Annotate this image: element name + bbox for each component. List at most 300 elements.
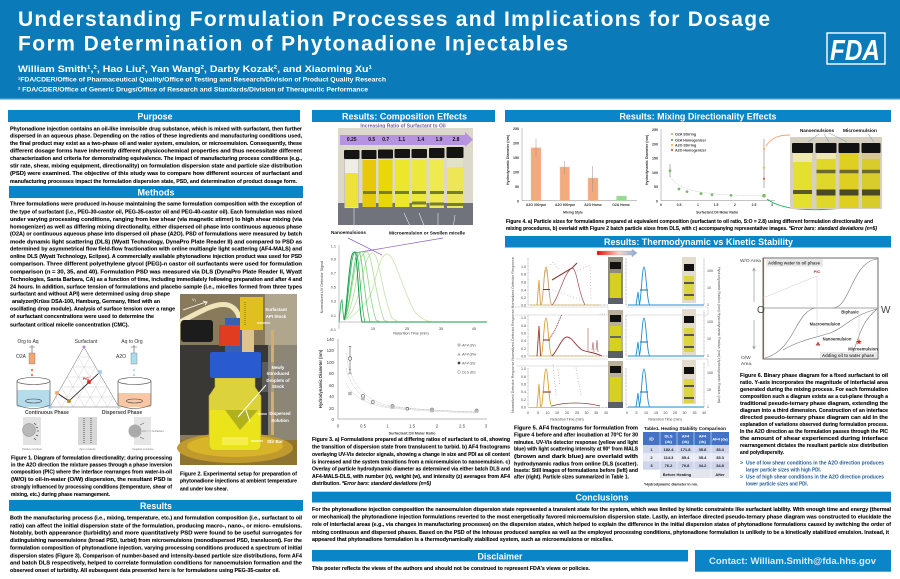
table 1: heating stability comparison: 3	[650, 463, 653, 468]
figure 4b: scatter chart: 2.5	[752, 203, 756, 207]
takeaway bullets: >	[740, 460, 743, 466]
figure 4b: scatter chart: 1.5	[714, 203, 718, 207]
takeaway bullets: lower particle sizes and PDI.	[746, 481, 808, 487]
legend: A2O Homogenizer	[675, 148, 707, 152]
table 1: heating stability comparison: AF4	[699, 434, 707, 438]
panel: conclusions: or mechanical) the phytonadione injection formulations reverted to the most energetically favored microemulsion dispersion state. Lastly, an interface directed pseudo-ternary phase diagram was constructed to elucidate the	[312, 515, 891, 521]
table 1: heating stability comparison: 171.8	[680, 447, 691, 452]
figure 1: formulation directionality diagram: A2O	[116, 354, 126, 360]
figure 5: fractograms grid: 1	[707, 303, 709, 307]
figure 3b: fractogram chart: 45	[472, 327, 476, 331]
figure 3a: vial photo with ratio arrow: Nanoemulsions	[331, 230, 366, 235]
figure 4b: scatter chart: 3	[771, 203, 773, 207]
error bar	[349, 346, 351, 370]
table 1: heating stability comparison: AF4 (dₕ)	[712, 436, 728, 442]
panel: methods: oscillating drop module). Analysis of surface tension over a range	[10, 307, 175, 313]
icon: FDA logo: FDA	[830, 35, 880, 67]
figure 5: fractograms grid: 10	[644, 411, 648, 415]
figure 3c: hydrodynamic diameter chart: 2	[436, 424, 439, 428]
figure 2: experimental setup photo: Newly	[272, 365, 285, 370]
label: dispersed solution: Solution	[271, 418, 289, 423]
figure 5: fractograms grid: 100	[707, 269, 713, 273]
figure 3 caption: is increased and the system transitions from a microemulsion to nanoemulsion. c)	[312, 460, 510, 466]
panel: disclaimer: Disclaimer	[478, 551, 523, 561]
figure 4b: scatter chart: 150	[652, 156, 658, 160]
panel: results text: ratio) can affect the initial dispersion state of the formulation, producing macro-, nano-, or micro- emulsions.	[10, 524, 303, 530]
figure 1: formulation directionality diagram: O2A	[16, 354, 27, 360]
figure 6 caption: diagram into a third dimension. Construction of an interface	[740, 408, 888, 414]
row frame lines	[515, 307, 708, 366]
data points	[348, 357, 478, 412]
figure 5: fractograms grid: 0.8	[521, 272, 526, 276]
legend	[457, 344, 477, 374]
figure 6 caption: Figure 6. Binary phase diagram for a fixed surfactant to oil	[740, 373, 888, 379]
affiliations	[18, 76, 386, 94]
figure 4a: bar chart: 250	[513, 127, 519, 131]
figure 3 caption: overlaying UV-Vis detector signals, showing a change in size and PDI as oil content	[312, 452, 510, 458]
table 1: heating stability comparison: 1	[650, 447, 653, 452]
figure 2 caption: Figure 2. Experimental setup for preparation of	[180, 472, 297, 478]
panel: methods: (O2A) or continuous aqueous phase into dispersed oil phase (A2O). PSD of formulations were measured by batch	[10, 231, 302, 237]
table 1: heating stability comparison: 35.4	[699, 455, 707, 460]
figure 3c: hydrodynamic diameter chart: 0	[332, 417, 335, 422]
table 1: heating stability comparison: 35.4	[716, 447, 725, 452]
figure 5: fractograms grid: 0.8	[521, 324, 526, 328]
panel: results text: observed onset of turbidity. All subsequent data presented here is for formulations using PEG-35-castor oil.	[10, 568, 280, 574]
figure 5: fractograms grid: 5	[636, 411, 638, 415]
vial bands	[363, 192, 463, 204]
figure 3c: hydrodynamic diameter chart: 100	[327, 360, 335, 365]
figure 3c: hydrodynamic diameter chart: 3	[485, 424, 488, 428]
figure 6 caption: explanation of variations observed during formulation process.	[740, 422, 888, 428]
panel: results text: dispersion states (Figure 3). Comparison of number-based and intensity-based particle size distributions, form AF4	[10, 554, 302, 560]
table 1: heating stability comparison: 70.8	[682, 463, 690, 468]
figure 5: fractograms grid: 10	[707, 388, 711, 392]
figure 3 caption: Figure 3. a) Formulations prepared at differing ratios of surfactant to oil, showing	[312, 437, 510, 443]
figure 3c: hydrodynamic diameter chart: 2.5	[459, 424, 466, 428]
figure 4a: bar chart: A2O 300rpm	[526, 203, 546, 207]
figure 3b: fractogram chart: Normalized UV Detector Signal	[320, 261, 324, 313]
red cap	[219, 325, 240, 346]
label: dispersed solution: Dispersed	[269, 411, 291, 416]
figure 6 caption: directed pseudo-ternary phase diagram can aid in the	[740, 415, 888, 421]
figure 6: binary phase diagram: Nanoemulsion	[823, 336, 852, 342]
panel: conclusions: For the phytonadione injection composition the nanoemulsion dispersion state represented a transient state for the system, which was limited by kinetic constraints like surfactant lability. With enough time and energy (thermal	[312, 507, 891, 513]
panel: results text	[9, 500, 303, 574]
labels inside diagram	[766, 259, 823, 266]
figure 6: binary phase diagram: Area.	[741, 361, 752, 367]
figure 4b: scatter chart: 100	[652, 171, 658, 175]
panel: disclaimer: This poster reflects the views of the authors and should not be construed to represent FDA's views or policies.	[312, 566, 590, 572]
figure 5: fractograms grid: 100	[707, 320, 713, 324]
figure 2 caption: and under low shear.	[180, 486, 228, 492]
figure 1 caption: Figure 1. Diagram of formulation directionality; during processing	[11, 456, 172, 462]
figure 4c: vial photo	[790, 128, 882, 209]
figure 6 caption	[740, 373, 889, 456]
figure 4a: bar chart: O2A Homo	[612, 203, 630, 207]
legend	[671, 132, 707, 152]
insets: before heating vials	[608, 257, 623, 408]
title: Understanding Formulation Processes and Implications for Dosage	[18, 8, 770, 31]
figure 3c: hydrodynamic diameter chart: 40	[329, 394, 335, 399]
label: surfactant stock	[265, 307, 287, 319]
figure 3c: hydrodynamic diameter chart: Hydrodynamic Diameter (nm)	[318, 349, 323, 408]
figure 5: fractograms grid: 0.0	[521, 406, 526, 410]
figure 4 caption: mixing procedures, b) overlaid with Figure 2 batch particle sizes from DLS, with c) accompanying representative images. *Error bars: standard deviations (n=5)	[506, 226, 877, 232]
figure 5: fractograms grid: 0.4	[521, 288, 526, 292]
panel: methods: Three formulations were produced in-house maintaining the same formulation composition with the exception of	[10, 202, 302, 208]
tubing	[180, 304, 241, 328]
figure 3a: vial photo with ratio arrow	[331, 124, 473, 236]
figure 5 caption: Figure 5. AF4 fractograms for formulation from	[514, 425, 638, 431]
threaded connector	[242, 328, 254, 352]
contact box: Contact: William.Smith@fda.hhs.gov	[709, 556, 877, 567]
figure 4a: bar chart: A2O 600rpm	[555, 203, 575, 207]
panel: purpose: different dosage forms have inherently different physicochemical properties and thus necessitate different	[10, 149, 302, 155]
takeaway bullets	[740, 460, 884, 487]
figure 2: experimental setup photo	[177, 294, 297, 465]
table 1: heating stability comparison: (dₕ)	[699, 439, 707, 444]
figure 4a: bar chart: 200	[513, 142, 519, 146]
figure 4b: scatter chart: Surfactant:Oil Molar Ratio	[696, 210, 738, 214]
figure 3b: fractogram chart: 0.3	[331, 300, 336, 304]
error bars	[536, 139, 593, 192]
figure 4 caption: Figure 4. a) Particle sizes for formulations prepared at equivalent composition (surfactant to oil ratio, S:O = 2.8) using different formulation directionality and	[506, 219, 873, 225]
table 1: heating stability comparison: 114.3	[664, 455, 674, 460]
icon: A2O syringe and beaker	[118, 345, 151, 408]
blue cap	[210, 352, 261, 378]
bars	[531, 148, 541, 201]
figure 5: fractograms grid: 0	[527, 411, 529, 415]
figure 2: experimental setup photo: Droplets of	[266, 378, 290, 383]
figure 3b: fractogram chart: 0.5	[331, 286, 336, 290]
legend: AF4 dhw	[461, 352, 477, 356]
panel: results text: Results	[140, 501, 172, 511]
authors: William Smith¹,², Hao Liu², Yan Wang², Darby Kozak², and Xiaoming Xu¹	[18, 64, 372, 75]
figure 5: fractograms grid: 1.0	[521, 367, 526, 371]
panel: conclusions	[312, 492, 891, 543]
figure 5: fractograms grid: Hydrodynamic Radius (nm) Hydrodynamic Radius (nm) Hydrodynamic Radius (nm)	[717, 267, 721, 403]
panel: purpose	[8, 110, 303, 185]
icon: positive curvature	[22, 417, 43, 451]
figure 6: binary phase diagram: Macroemulsion	[810, 321, 841, 326]
legend: O2A Stirring	[675, 132, 696, 136]
figure 5: fractograms grid: 0.6	[521, 280, 526, 284]
figure 3b: fractogram chart: 0.9	[331, 258, 336, 262]
figure 4b: scatter chart: 250	[652, 128, 658, 132]
figure 6: binary phase diagram: O/W	[741, 355, 751, 361]
ternary diagram: PIC	[83, 377, 89, 381]
figure 4b: scatter chart: 50	[654, 185, 658, 189]
figure 5: fractograms grid: 10	[707, 286, 711, 290]
figure 5: fractograms grid: 35	[594, 411, 598, 415]
vial pointer lines	[354, 208, 455, 231]
panel: results text: Both the manufacturing process (i.e., mixing, temperature, etc.) and formulation composition (i.e., surfactant to oil	[10, 516, 302, 522]
table 1: heating stability comparison: 34.8	[716, 463, 725, 468]
table 1: heating stability comparison: 182.4	[663, 447, 674, 452]
figure 4b: scatter chart: Hydrodynamic Diameter (nm)	[645, 134, 649, 185]
figure 4b: scatter chart	[645, 128, 873, 214]
figure 3c: hydrodynamic diameter chart: 0.5	[360, 424, 367, 428]
figure 4a: bar chart: Hydrodynamic Diameter (nm)	[506, 134, 510, 185]
figure 6: binary phase diagram: Biphasic	[841, 310, 859, 314]
figure 5: fractograms grid: 0.8	[521, 375, 526, 379]
panel: purpose: Phytonadione injection contains an oil-like immiscible drug substance, which is mixed with surfactant, then further	[10, 126, 303, 132]
figure 3a: vial photo with ratio arrow: 2.8	[453, 137, 460, 143]
figure 6 caption: the amount of shear experienced during interface	[740, 436, 888, 442]
arrows to photo	[766, 135, 790, 146]
figure 2 caption: phytonadione injections at ambient temperature	[180, 479, 297, 485]
legend: AF4 dhn	[461, 344, 476, 348]
figure 3b: fractogram chart: Retention Time (min)	[393, 332, 429, 336]
figure 2: experimental setup photo: Stock	[272, 384, 285, 389]
figure 5: fractograms grid: 30	[584, 411, 588, 415]
figure 4b: scatter chart: 0	[660, 203, 662, 207]
figure 5: fractograms grid: 15	[555, 411, 559, 415]
takeaway bullets: Use of high shear conditions in the A2O direction produces	[746, 475, 884, 481]
figure 2: experimental setup photo: V₁	[192, 297, 197, 302]
figure 4b: scatter chart: 200	[652, 142, 658, 146]
figure 3 caption	[312, 437, 510, 487]
axes	[528, 258, 704, 407]
icon: zero curvature: Zero curvature	[79, 448, 96, 451]
figure 1 caption	[11, 456, 172, 498]
table 1: heating stability comparison: DLS	[664, 434, 673, 438]
figure 5: fractograms grid: 0.4	[521, 339, 526, 343]
figure 3a: vial photo with ratio arrow: 1.4	[417, 137, 424, 143]
figure 5: fractograms grid: 0.0	[521, 354, 526, 358]
figure 6 caption: composition such a diagram exists as a cut-plane through a	[740, 394, 889, 400]
figure 5: fractograms grid: 0.6	[521, 382, 526, 386]
label: dispersed solution	[269, 411, 291, 423]
panel: purpose: the final product may exist as a two-phase oil and water system, emulsion, or microemulsion. Consequently, these	[10, 141, 302, 147]
figure 5: fractograms grid: 0.4	[521, 390, 526, 394]
figure 5: fractograms grid: 10	[707, 337, 711, 341]
icon: negative curvature: Negative curvature	[133, 448, 154, 451]
figure 1: formulation directionality diagram: Surfactant	[75, 339, 98, 345]
contact box	[695, 550, 891, 572]
figure 5: fractograms grid: 1	[707, 405, 709, 409]
panel: conclusions: appeared that phytonadione formulation is a thermodynamically stabilized system, such as microemulsions or micelles.	[312, 537, 613, 543]
figure 5: fractograms grid: 5	[537, 411, 539, 415]
figure 3a: vial photo with ratio arrow: 0.5	[368, 137, 375, 143]
figure 1: formulation directionality diagram: Org to Aq	[17, 339, 39, 345]
panel: methods: surfactant critical micelle concentration (CMC).	[10, 322, 129, 328]
panel: methods: online DLS (Wyatt Technology, Eclipse). A commercially available phytonadione injection product was used for PSD	[10, 254, 302, 260]
panel: results text: and batch DLS respectively, helped to correlate formulation conditions for nanoemulsion formation and the	[10, 561, 302, 567]
affiliations: ² FDA/CDER/Office of Generic Drugs/Office of Research and Standards/Division of Therapeutic Performance	[18, 86, 369, 94]
insets: after heating vials	[682, 257, 696, 404]
table 1: heating stability comparison: (dₕ)	[665, 439, 673, 444]
figure 5: fractograms grid	[511, 257, 721, 422]
figure 6: binary phase diagram	[740, 258, 891, 367]
label: surfactant stock: API Stock	[266, 314, 287, 319]
figure 5 caption: after (right). Particle sizes summarized in Table 1.	[514, 475, 629, 481]
heading: mixing directionality effects: Results: Mixing Directionality Effects	[620, 112, 776, 122]
panel: purpose: (PSD) were examined. The objective of this study was to compare how different sources of surfactant and	[10, 171, 302, 177]
figure 1: formulation directionality diagram: Dispersed Phase	[102, 410, 142, 416]
figure 2: experimental setup photo: Introduced	[267, 371, 290, 376]
figure 1 caption: strongly influenced by processing conditions (temperature, shear of	[11, 485, 172, 491]
figure 3b: fractogram chart: 1.1	[331, 244, 336, 248]
figure 4b: scatter chart: 0.5	[677, 203, 681, 207]
figure 6 caption: In the A2O direction as the formulation passes through the PIC	[740, 429, 888, 435]
panel: purpose: manufacturing processes impact the formulation dispersion state, PSD, and determination of product dosage form.	[10, 179, 297, 185]
figure 5: fractograms grid: 1.0	[521, 316, 526, 320]
figure 3a: vial photo with ratio arrow: Increasing Ratio of Surfactant to Oil	[360, 124, 446, 130]
figure 3a: vial photo with ratio arrow: 0.25	[347, 137, 357, 143]
figure 4a: bar chart: 150	[513, 156, 519, 160]
ternary diagram	[48, 346, 120, 408]
figure 4a: bar chart: 50	[515, 185, 519, 189]
figure 5: fractograms grid: 40	[702, 411, 706, 415]
figure 4a: bar chart: 0	[517, 200, 519, 204]
figure 5: fractograms grid: 0.2	[521, 296, 526, 300]
label: surfactant stock: Surfactant	[265, 307, 287, 312]
figure 3b: fractogram chart: 15	[371, 327, 375, 331]
arrow: before to after heating	[597, 249, 637, 257]
data points	[669, 170, 766, 197]
figure 3b: fractogram chart: 25	[405, 327, 409, 331]
figure 4b: scatter chart: 1	[697, 203, 699, 207]
figure 4a: bar chart: Mixing Style	[563, 210, 583, 214]
figure 6: binary phase diagram: W	[881, 305, 891, 316]
figure 6: binary phase diagram: Adding water to oil phase	[768, 260, 821, 266]
figure 5: fractograms grid: 100	[707, 371, 713, 375]
panel: methods: homogenizer) as well as differing mixing directionality, either dispersed oil phase into continuous aqueous phase	[10, 225, 302, 231]
panel: methods: mode dynamic light scattering (DLS) (Wyatt Technology, DynaPro Plate Reader II) and compared to PSD as	[10, 239, 302, 245]
figure 3 caption: AF4-MALS-DLS, with number (n), weight (w), and intensity (z) averages from AF4	[312, 474, 510, 480]
figure 3c: hydrodynamic diameter chart: 80	[329, 371, 335, 376]
ratio arrow	[340, 132, 473, 147]
fit curve	[670, 176, 764, 196]
panel: methods: comparison (n = 30, 35, and 40). Formulation PSD was measured via DLS (DynaPro Plate Reader II, Wyatt	[10, 270, 302, 276]
axis arrows	[753, 268, 755, 349]
figure 3a: vial photo with ratio arrow: 0.7	[382, 137, 389, 143]
panel: methods: under varying processing conditions, ranging from low shear (via magnetic stirrer) to high shear mixing (via	[10, 217, 303, 223]
figure 5: fractograms grid: 35	[692, 411, 696, 415]
legend: A2O Stirring	[675, 143, 696, 147]
flow arrow	[183, 301, 207, 310]
stir plate	[180, 440, 297, 465]
panel: purpose: stir rate, shear, mixing equipment, directionality) on formulation dispersion state and particle size distribution	[10, 164, 302, 170]
figure 6 caption: and polydispersity.	[740, 450, 784, 456]
panel: results text: formulation composition of phytonadione injection, varying processing conditions produced a spectrum of initial	[10, 546, 303, 552]
figure 6: binary phase diagram: W/O Area	[740, 258, 761, 264]
panel: conclusions: mixing continuous and dispersed phases. Based on the PSD of the inhouse produced samples as well as the employed processing conditions, phytonadione formulation is unlikely to be a kinetically stabilized emulsion. Instead, it	[312, 530, 889, 536]
figure 5 caption: Insets: Still images of formulations before (left) and	[514, 468, 638, 474]
figure 4a: bar chart: A2O Homo	[584, 203, 602, 207]
figure 6: binary phase diagram: Adding oil to water phase	[822, 353, 875, 358]
affiliations: ¹FDA/CDER/Office of Pharmaceutical Quality/Office of Testing and Research/Division of Product Quality Research	[18, 76, 386, 84]
panel: disclaimer	[312, 550, 688, 572]
heading: thermodynamic vs kinetic stability	[505, 236, 891, 248]
figure 5: fractograms grid: 25	[673, 411, 677, 415]
figure 1 caption: (W/O) to oil-in-water (O/W) dispersion, the resultant PSD is	[11, 477, 172, 483]
figure 4a: bar chart	[506, 127, 637, 214]
header banner	[0, 0, 900, 100]
title	[18, 8, 770, 56]
figure 5 caption: Figure 4 before and after incubation at 70°C for 30	[514, 432, 638, 438]
figure 3a: vial photo with ratio arrow: 1.9	[436, 137, 443, 143]
figure 3c: hydrodynamic diameter chart: 1.5	[409, 424, 416, 428]
figure 3a: vial photo with ratio arrow: 1.1	[398, 137, 405, 143]
figure 1 caption: mixing, etc.) during phase rearrangement.	[11, 492, 110, 498]
panel: purpose: characterization and criteria for demonstrating equivalence. The impact of manufacturing process conditions (e.g.,	[10, 156, 302, 162]
figure 5 caption: minutes. UV-Vis detector response (yellow and light	[514, 440, 638, 446]
row 2 traces	[530, 314, 704, 356]
table 1: heating stability comparison: 35.3	[716, 455, 725, 460]
panel: results text: Notably, both appearance (turbidity) and more quantitatively PSD were found to be useful surrogates for	[10, 531, 303, 537]
bottle and liquid	[209, 378, 261, 450]
row 1 traces	[530, 262, 704, 305]
panel: methods: Technologies, Santa Barbara, CA) as a function of time, including immediately following preparation and after 4 and	[10, 277, 302, 283]
figure 6 caption: generated during the mixing process. For each formulation	[740, 387, 888, 393]
figure 1 caption: in the A2O direction the mixture passes through a phase inversion	[11, 462, 172, 468]
figure 3c: hydrodynamic diameter chart: Surfactant:Oil Molar Ratio	[389, 432, 436, 436]
figure 1: formulation directionality diagram: Continuous Phase	[25, 410, 69, 416]
table 1: heating stability comparison: 34.2	[699, 463, 707, 468]
figure 5: fractograms grid: 10	[546, 411, 550, 415]
figure 6: binary phase diagram: Microemulsion	[848, 346, 878, 352]
takeaway bullets: larger particle sizes with high PDI.	[746, 467, 821, 473]
figure 5: fractograms grid: Retention Time (min)	[648, 418, 682, 422]
figure 6 caption: rearrangement dictates the resultant particle size distribution	[740, 443, 888, 449]
row 3 traces	[530, 365, 704, 407]
label: stir bar: Stir Bar	[267, 439, 283, 444]
legend: AF4 dhz	[461, 362, 476, 366]
fit curves	[346, 353, 475, 413]
table 1: heating stability comparison: 85.4	[682, 455, 690, 460]
figure 5: fractograms grid: 20	[664, 411, 668, 415]
figure 5: fractograms grid: 0.2	[521, 347, 526, 351]
figure 3c: hydrodynamic diameter chart: 20	[329, 406, 335, 411]
panel: methods: determined by asymmetrical flow field-flow fractionation with online multiangle light scattering (AF4-MALS) and	[10, 246, 302, 252]
panel: methods: Methods	[138, 188, 174, 198]
figure 5: fractograms grid: 20	[565, 411, 569, 415]
figure 6: binary phase diagram: O	[757, 305, 765, 316]
figure 3c: hydrodynamic diameter chart: 120	[327, 348, 335, 353]
panel: purpose: Purpose	[138, 112, 172, 122]
table 1: heating stability comparison: AF4	[682, 434, 690, 438]
figure 6 caption: ratio. Y-axis incorporates the magnitude of interfacial area	[740, 380, 889, 386]
icon: O2A syringe and beaker	[17, 345, 50, 408]
figure 6: binary phase diagram: ★	[855, 338, 863, 346]
panel: methods	[9, 186, 303, 328]
yellow tag	[240, 297, 263, 330]
takeaway bullets: >	[740, 475, 743, 481]
panel: methods: analyzer(Krüss DSA-100, Hamburg, Germany, fitted with an	[12, 299, 160, 305]
icon: positive curvature: Positive curvature	[22, 448, 43, 451]
table 1: heating stability comparison: 35.8	[699, 447, 707, 452]
figure 5: fractograms grid: 1	[707, 354, 709, 358]
table 1: heating stability comparison: Table1. Heating Stability Comparison	[644, 426, 726, 432]
figure 3b: fractogram chart	[320, 238, 487, 336]
figure 2 caption	[180, 472, 297, 492]
vials	[344, 159, 358, 208]
takeaway bullets: Use of low shear conditions in the A2O direction produces	[746, 460, 884, 466]
figure 3 caption: distribution. *Error bars: standard deviations (n=5)	[312, 481, 431, 487]
figure 6 caption: traditional pseudo-ternary phase diagram, extending the	[740, 401, 888, 407]
panel: methods: the type of surfactant (i.e., PEG-30-castor oil, PEG-35-castor oil and PEG-40-castor oil). Each formulation was mixed	[10, 210, 302, 216]
figure 4b: scatter chart: 0	[656, 200, 658, 204]
figure 4a: bar chart: 100	[513, 170, 519, 174]
table 1: heating stability comparison: 76.2	[665, 463, 673, 468]
figure 5: fractograms grid: 15	[654, 411, 658, 415]
panel: methods: of surfactant concentrations were used to determine the	[10, 314, 154, 320]
figure 4c: vial photo: Microemulsion	[843, 128, 877, 133]
icon: zero curvature	[78, 417, 97, 451]
